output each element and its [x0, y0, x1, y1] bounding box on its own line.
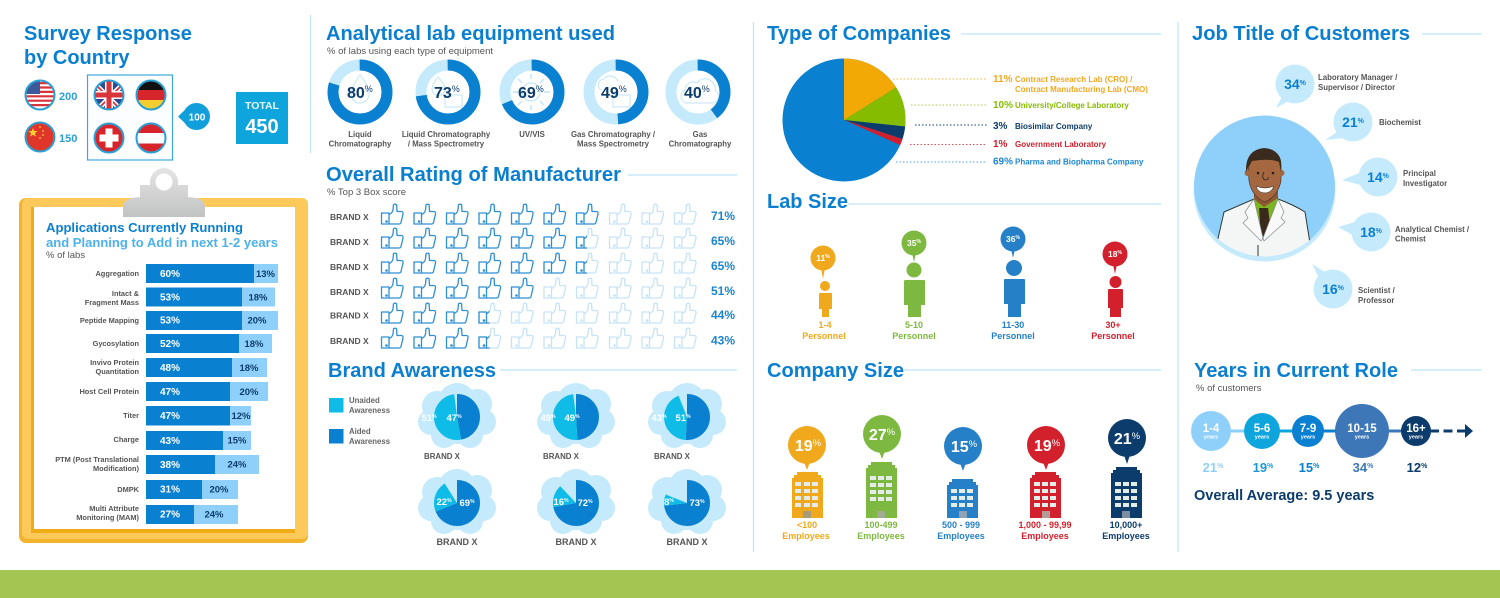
bubble: 34% lab manager: 34 [1284, 76, 1300, 92]
person: 5-10 personnel: 5-10 [905, 320, 923, 330]
person: 30+ personnel: Personnel [1091, 331, 1135, 341]
icon: Austria flag [136, 123, 166, 153]
person: 5-10 personnel: Personnel [892, 331, 936, 341]
node: 1-4 years: years [1204, 434, 1218, 440]
legend row: CRO/CMO: Contract Manufacturing Lab (CMO) [1015, 85, 1148, 94]
building: 1,000-9,999 employees: Employees [1021, 531, 1069, 541]
building: under 100 employees: % [813, 438, 822, 449]
bar: charge: 15% [227, 436, 247, 446]
building: 10,000+ employees [1102, 419, 1150, 541]
donut: gas chromatography 40%: % [702, 84, 710, 94]
rating row 43%: 43% [711, 334, 735, 348]
legend row: university: University/College Laboratory [1015, 101, 1129, 110]
cloud pie 4: % [447, 498, 452, 504]
legend row: pharma: Pharma and Biopharma Company [1015, 158, 1144, 166]
bar: peptide mapping [80, 311, 278, 330]
person: 1-4 personnel: % [825, 254, 830, 260]
person: 30+ personnel [1091, 242, 1135, 341]
bubble: 18% analytical chemist: Analytical Chemist / [1395, 225, 1470, 234]
panel: lab size [767, 191, 1161, 341]
building: 500-999 employees: 500 - 999 [942, 520, 980, 530]
rating row 51%: 51% [711, 284, 735, 298]
cloud pie 5: % [564, 498, 569, 504]
bar: glycosylation [93, 334, 272, 353]
node: 7-9 years [1292, 415, 1324, 447]
building: 10,000+ employees: % [1132, 431, 1141, 442]
bubble: 21% biochemist [1325, 102, 1421, 142]
bubble: 18% analytical chemist: Chemist [1395, 234, 1426, 244]
icon: China flag [25, 122, 55, 152]
cloud pie 3: % [686, 414, 691, 420]
donut: UV/VIS 69%: 69 [518, 85, 536, 102]
person: 5-10 personnel [892, 230, 936, 341]
cloud pie 1: % [457, 414, 462, 420]
subtitle: customers: % of customers [1196, 383, 1262, 394]
bar: titer [123, 406, 251, 426]
node: 16+ years: years [1409, 434, 1423, 440]
rating row 44%: BRAND X [330, 310, 369, 320]
person: 11-30 personnel [991, 226, 1035, 341]
bar: PTM: 38% [160, 460, 180, 471]
heading: years in current role: Years in Current Role [1194, 360, 1398, 382]
legend row: CRO/CMO: Contract Research Lab (CRO) / [1015, 75, 1133, 84]
building: 500-999 employees: % [969, 439, 978, 450]
bar: host cell protein [79, 382, 268, 401]
legend row: pharma [896, 156, 1144, 168]
donut: liquid chromatography 80%: Chromatography [329, 140, 392, 148]
bubble: 21% biochemist: 21 [1342, 114, 1358, 130]
bar: intact and fragment mass: 53% [160, 292, 180, 304]
bubble: 14% principal investigator: Principal [1403, 169, 1436, 178]
overall average: Overall Average: 9.5 years [1194, 488, 1374, 504]
cloud pie 1: 47 [446, 413, 457, 424]
person: 30+ personnel: 30+ [1105, 320, 1121, 330]
rating row 71% [330, 204, 735, 224]
icon: Switzerland flag [94, 123, 124, 153]
bubble: 16% scientist: 16 [1322, 281, 1338, 297]
heading: company size: Company Size [767, 360, 904, 382]
value: 200: 200 [59, 91, 77, 103]
bar: aggregation [95, 264, 278, 283]
person: 5-10 personnel: % [917, 239, 922, 245]
donut: gas chromatography 40%: Gas [693, 130, 708, 139]
donut: gas chromatography 40%: 40 [684, 85, 702, 102]
cloud pie 2 [537, 383, 615, 461]
donut: GC/MS 49%: Gas Chromatography / [571, 130, 656, 139]
bar: MAM: 27% [160, 510, 180, 520]
percent values: % [1217, 463, 1224, 470]
building: 100-499 employees: 100-499 [864, 520, 898, 530]
value: 150: 150 [59, 133, 77, 145]
donut: liquid chromatography 80% [329, 65, 392, 148]
rating row 71%: BRAND X [330, 212, 369, 222]
node: 1-4 years: 1-4 [1203, 423, 1220, 435]
cloud pie 6: 73 [689, 498, 700, 509]
callout: total 450 [236, 92, 288, 144]
bar: host cell protein: Host Cell Protein [79, 387, 139, 396]
clipboard board [19, 198, 308, 543]
bar: DMPK [117, 480, 238, 499]
heading: type of companies: Type of Companies [767, 23, 951, 45]
donut: gas chromatography 40% [669, 65, 732, 148]
percent values: % [1421, 463, 1428, 470]
arrow [1465, 424, 1473, 438]
cloud pie 5: 72 [577, 498, 588, 509]
legend row: university [911, 100, 1129, 111]
bubble: 16% scientist: Scientist / [1358, 286, 1396, 295]
footer band [0, 570, 1500, 598]
person: 11-30 personnel: % [1016, 235, 1021, 241]
heading: applications: Applications Currently Running [46, 220, 243, 235]
rating row 65%: 65% [711, 234, 735, 248]
bubble: 34% lab manager: Laboratory Manager / [1318, 73, 1398, 82]
bar: charge: Charge [114, 435, 139, 444]
heading: job title: Job Title of Customers [1192, 23, 1410, 45]
building: 10,000+ employees: 21 [1114, 431, 1132, 448]
bubble: 18% analytical chemist [1338, 212, 1470, 252]
bar: intact and fragment mass: Fragment Mass [85, 298, 139, 307]
cloud pie 3: 43 [651, 413, 662, 424]
cloud pie 4 [418, 469, 496, 547]
cloud pie 1: 51 [421, 413, 432, 424]
donut: GC/MS 49%: % [619, 84, 627, 94]
percent values: 21 [1203, 460, 1217, 475]
cloud pie 4: 22 [436, 497, 447, 508]
building: 1,000-9,999 employees [1018, 426, 1072, 541]
legend row: government: Government Laboratory [1015, 140, 1107, 149]
bar: MAM [76, 504, 238, 524]
bar: charge: 43% [160, 436, 180, 447]
panel: survey response by country [24, 23, 288, 160]
bar: DMPK: DMPK [117, 485, 140, 494]
donut: LC/MS 73%: / Mass Spectrometry [408, 140, 485, 148]
bubble: 14% principal investigator [1342, 158, 1447, 196]
cloud pie 2: % [575, 414, 580, 420]
bar: glycosylation: 18% [244, 339, 264, 350]
cloud pie 6: 8 [664, 497, 669, 508]
bubble: 14% principal investigator: 14 [1367, 169, 1383, 185]
illustration: scientist in circle [1194, 116, 1336, 270]
cloud pie 6: % [700, 499, 705, 505]
percent values: % [1313, 463, 1320, 470]
pie chart: companies [813, 89, 875, 151]
building: under 100 employees: <100 [797, 520, 817, 530]
donut: liquid chromatography 80%: % [365, 84, 373, 94]
heading: overall rating: Overall Rating of Manufacturer [326, 164, 621, 186]
callout: 100 [178, 103, 210, 130]
timeline: years [1191, 404, 1473, 458]
building: 10,000+ employees: 10,000+ [1110, 520, 1142, 530]
cloud pie 1: % [432, 414, 437, 420]
bar: DMPK: 31% [160, 484, 180, 496]
building: 1,000-9,999 employees: 19 [1034, 438, 1052, 455]
subtitle: equipment: % of labs using each type of equipment [327, 46, 493, 57]
heading: lab size: Lab Size [767, 191, 848, 213]
rating row 65% [330, 228, 735, 248]
panel: overall rating of manufacturer [326, 164, 737, 348]
bubble: 34% lab manager: % [1300, 80, 1307, 87]
rating row 51%: BRAND X [330, 287, 369, 297]
bar: MAM: Monitoring (MAM) [76, 513, 140, 522]
bar: PTM [55, 455, 259, 474]
bar: glycosylation: Gycosylation [93, 339, 139, 348]
heading: equipment: Analytical lab equipment used [326, 23, 615, 45]
donut: UV/VIS 69%: % [536, 84, 544, 94]
legend: awareness: Awareness [349, 406, 391, 415]
bar: intact and fragment mass: 18% [248, 292, 268, 304]
cloud pie 5 [537, 469, 615, 547]
donut: GC/MS 49%: Mass Spectrometry [577, 140, 650, 148]
person: 11-30 personnel: Personnel [991, 331, 1035, 341]
donut: GC/MS 49%: 49 [601, 85, 619, 102]
bar: intact and fragment mass: Intact & [112, 289, 140, 298]
person: 1-4 personnel: 1-4 [818, 320, 832, 330]
cloud pie 3: % [662, 414, 667, 420]
node: 5-6 years [1244, 413, 1280, 449]
group box of four flags [88, 75, 172, 160]
building: 100-499 employees: 27 [869, 427, 887, 444]
person: 30+ personnel: % [1118, 250, 1123, 256]
cloud pie 2: % [551, 414, 556, 420]
percent values: 15 [1299, 460, 1313, 475]
building: under 100 employees: Employees [782, 531, 830, 541]
legend row: government: 1% [993, 139, 1008, 150]
rating row 43% [330, 328, 735, 348]
node: 7-9 years: years [1301, 434, 1315, 440]
building: 10,000+ employees: Employees [1102, 531, 1150, 541]
building: 500-999 employees [937, 427, 985, 541]
bubble: 14% principal investigator: % [1383, 173, 1390, 180]
legend row: CRO/CMO: 11% [993, 74, 1013, 85]
node: 10-15 years: years [1355, 434, 1369, 440]
percent values: 34 [1353, 460, 1367, 475]
bar: host cell protein: 47% [160, 387, 180, 398]
heading: survey response: by Country [24, 47, 130, 69]
rating row 65% second [330, 253, 735, 273]
bubble: 18% analytical chemist: 18 [1360, 224, 1376, 240]
heading: survey response: Survey Response [24, 23, 192, 45]
bubble: 21% biochemist: % [1358, 118, 1365, 125]
legend: awareness [329, 396, 391, 446]
cloud pie 2: BRAND X [543, 452, 580, 461]
bar: aggregation: 60% [160, 269, 180, 280]
bubble: 34% lab manager [1276, 64, 1398, 108]
legend row: university: 10% [993, 100, 1013, 111]
panel: job title of customers [1192, 23, 1482, 308]
bubble: 16% scientist: % [1338, 285, 1345, 292]
percent values [1203, 460, 1428, 475]
donut: gas chromatography 40%: Chromatography [669, 140, 732, 148]
bar: invivo protein: Invivo Protein [90, 358, 139, 367]
legend row: pharma: 69% [993, 156, 1013, 168]
clipboard clip [123, 168, 205, 217]
bar: host cell protein: 20% [239, 387, 259, 398]
bar: PTM: PTM (Post Translational [55, 455, 139, 464]
cloud pie 4: 69 [459, 498, 470, 509]
rating row 44% [330, 303, 735, 323]
bar: peptide mapping: Peptide Mapping [80, 316, 139, 325]
legend: awareness: Aided [349, 427, 371, 436]
donut: liquid chromatography 80%: 80 [347, 85, 365, 102]
node: 10-15 years: 10-15 [1347, 423, 1377, 435]
bar: peptide mapping: 53% [160, 316, 180, 326]
building: 100-499 employees: Employees [857, 531, 905, 541]
cloud pie 1 [418, 383, 496, 461]
bar: peptide mapping: 20% [247, 316, 267, 326]
bar: aggregation: 13% [256, 269, 276, 280]
bar: glycosylation: 52% [160, 339, 180, 350]
bar chart: applications [55, 264, 278, 524]
bar: MAM: 24% [204, 510, 224, 520]
bar: PTM: Modification) [93, 464, 140, 473]
donut: LC/MS 73% [402, 65, 491, 148]
donut: liquid chromatography 80%: Liquid [348, 130, 372, 139]
donut: UV/VIS 69%: UV/VIS [519, 130, 545, 139]
person: 30+ personnel: 18 [1108, 249, 1118, 259]
cloud pie 6: % [669, 498, 674, 504]
node: 16+ years [1401, 416, 1431, 446]
panel: analytical lab equipment [326, 23, 732, 148]
node: 1-4 years [1191, 411, 1231, 451]
bar: titer: 12% [231, 411, 251, 422]
building: 1,000-9,999 employees: % [1052, 438, 1061, 449]
panel: years in current role [1191, 360, 1482, 504]
rating row 65% second: 65% [711, 259, 735, 273]
icon: US flag [25, 80, 55, 110]
donut: UV/VIS 69% [505, 65, 559, 139]
percent values: 19 [1253, 460, 1267, 475]
panel: type of companies [767, 23, 1161, 168]
node: 10-15 years [1335, 404, 1389, 458]
percent values: 12 [1407, 460, 1421, 475]
person: 1-4 personnel [802, 246, 846, 341]
rating row 65%: BRAND X [330, 237, 369, 247]
callout: 100: 100 [189, 112, 206, 124]
legend row: CRO/CMO [893, 74, 1148, 94]
cloud pie 4: % [470, 499, 475, 505]
bubble: 18% analytical chemist: % [1376, 228, 1383, 235]
building: under 100 employees: 19 [795, 438, 813, 455]
rating row 51% [330, 278, 735, 298]
bar: intact and fragment mass [85, 288, 275, 307]
cloud pie 2: 49 [540, 413, 551, 424]
cloud pie 2: 49 [564, 413, 575, 424]
person: 11-30 personnel: 36 [1006, 234, 1016, 244]
bubble: 21% biochemist: Biochemist [1379, 118, 1421, 127]
bar: DMPK: 20% [209, 484, 229, 496]
building: 100-499 employees: % [887, 427, 896, 438]
bar: aggregation: Aggregation [95, 269, 139, 278]
percent values: % [1367, 463, 1374, 470]
cloud pie 3 [648, 383, 726, 461]
node: 7-9 years: 7-9 [1300, 423, 1316, 435]
callout: total 450: TOTAL [245, 100, 280, 112]
percent values: % [1267, 463, 1274, 470]
subtitle: top 3 box: % Top 3 Box score [327, 187, 406, 198]
cloud pie 3: 51 [675, 413, 686, 424]
legend row: biosimilar: 3% [993, 121, 1008, 132]
cloud pie 6 [648, 469, 726, 547]
person: 5-10 personnel: 35 [907, 238, 917, 248]
bar: invivo protein: 18% [239, 363, 259, 374]
cloud pie 5: BRAND X [555, 537, 597, 547]
legend: awareness: Unaided [349, 396, 380, 405]
cloud pie 6: BRAND X [666, 537, 708, 547]
node: 5-6 years: 5-6 [1254, 423, 1270, 435]
person: 1-4 personnel: 11 [816, 253, 825, 263]
bubble: 16% scientist [1312, 264, 1396, 308]
rating row 44%: 44% [711, 308, 735, 322]
icon: UK flag [94, 80, 124, 110]
cloud pie 5: 16 [553, 497, 564, 508]
person: 11-30 personnel: 11-30 [1002, 320, 1024, 330]
building: 500-999 employees: 15 [951, 439, 969, 456]
building: 500-999 employees: Employees [937, 531, 985, 541]
donut: LC/MS 73%: % [452, 84, 460, 94]
cloud pie 4: BRAND X [436, 537, 478, 547]
rating row 65% second: BRAND X [330, 262, 369, 272]
legend row: biosimilar [915, 121, 1093, 132]
cloud pie 3: BRAND X [654, 452, 691, 461]
panel: applications clipboard [19, 168, 308, 543]
bubble: 14% principal investigator: Investigator [1403, 179, 1447, 188]
bar: PTM: 24% [227, 460, 247, 470]
panel: brand awareness [328, 360, 737, 547]
node: 5-6 years: years [1255, 434, 1269, 440]
bar: MAM: Multi Attribute [89, 504, 139, 513]
bar: invivo protein: 48% [160, 363, 180, 374]
subtitle: % of labs [46, 250, 85, 261]
callout: total 450: 450 [245, 116, 279, 138]
building: 100-499 employees [857, 415, 905, 541]
panel: company size [767, 360, 1161, 541]
rating row 71%: 71% [711, 209, 735, 223]
legend row: biosimilar: Biosimilar Company [1015, 122, 1093, 131]
person: 1-4 personnel: Personnel [802, 331, 846, 341]
bar: invivo protein [90, 358, 267, 377]
column divider [310, 15, 312, 153]
bubble: 34% lab manager: Supervisor / Director [1318, 83, 1395, 92]
legend row: government [910, 139, 1107, 150]
bubble: 16% scientist: Professor [1358, 296, 1394, 305]
donut: GC/MS 49% [571, 65, 656, 148]
building: under 100 employees [782, 426, 830, 541]
bar: titer: Titer [123, 411, 139, 420]
building: 1,000-9,999 employees: 1,000 - 99,99 [1018, 520, 1072, 530]
heading: brand awareness: Brand Awareness [328, 360, 496, 382]
donut: LC/MS 73%: Liquid Chromatography [402, 130, 491, 139]
node: 16+ years: 16+ [1406, 423, 1426, 435]
bar: titer: 47% [160, 411, 180, 422]
heading: planning to add: and Planning to Add in next 1-2 years [46, 235, 278, 250]
icon: Germany flag [136, 80, 166, 110]
cloud pie 5: % [588, 499, 593, 505]
cloud pie 1: BRAND X [424, 452, 461, 461]
legend: awareness: Awareness [349, 437, 391, 446]
donut: LC/MS 73%: 73 [434, 85, 452, 102]
bar: invivo protein: Quantitation [95, 367, 139, 376]
rating row 43%: BRAND X [330, 336, 369, 346]
bar: charge [114, 431, 251, 450]
